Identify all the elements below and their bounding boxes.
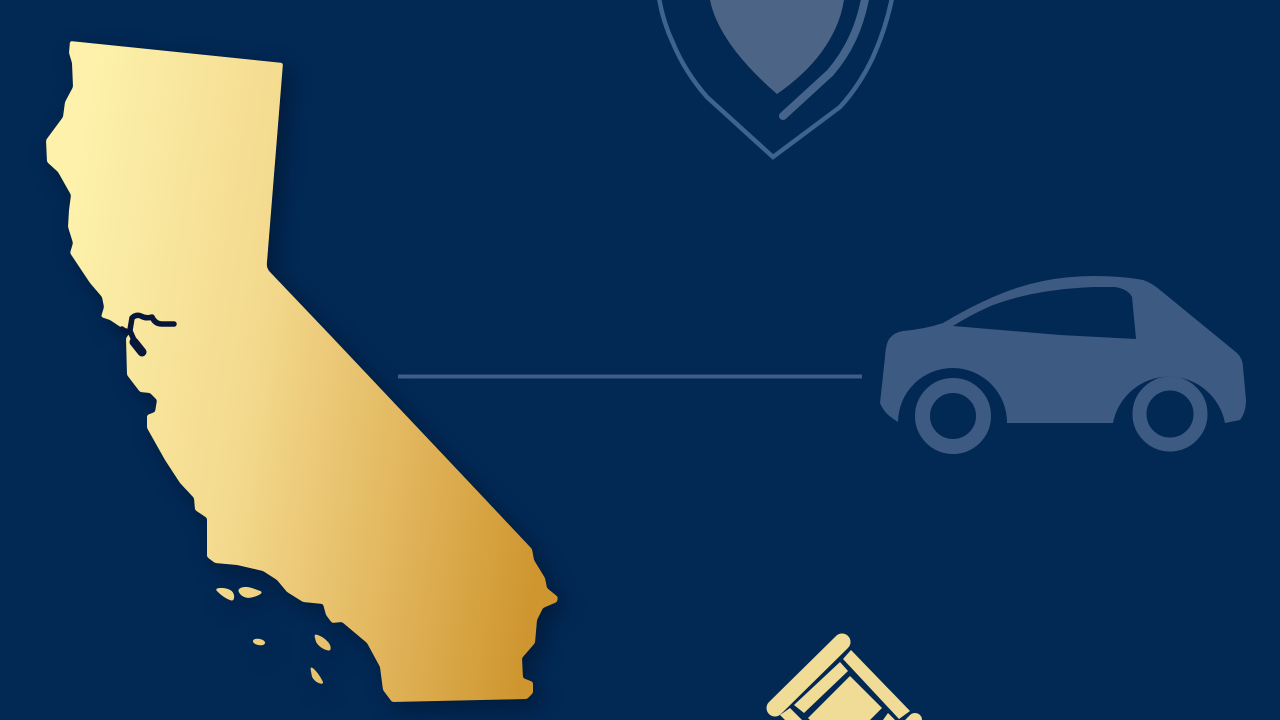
gavel lower right bar	[883, 713, 897, 720]
gavel side bar	[843, 650, 910, 719]
rear wheel	[1140, 384, 1200, 444]
icon: gavel	[775, 642, 915, 720]
gavel lower left bar	[780, 708, 815, 720]
island: west 1	[215, 588, 234, 601]
gavel main block	[808, 676, 882, 720]
gavel thin band	[794, 662, 848, 713]
island: south 1	[314, 634, 331, 651]
icon: shield	[659, 0, 892, 157]
shield inner stripe	[783, 0, 866, 116]
car body	[880, 276, 1246, 423]
connector line	[398, 374, 862, 378]
island: small	[252, 638, 266, 646]
San Francisco Bay	[122, 315, 174, 352]
map: California	[46, 41, 558, 702]
shield solid centre	[710, 0, 844, 94]
icon: car	[880, 276, 1246, 446]
island: south 2	[310, 666, 324, 684]
state outline	[46, 41, 558, 702]
island: west 2	[238, 587, 263, 598]
shield outer outline	[659, 0, 892, 157]
front wheel	[922, 386, 984, 446]
gavel top cap	[775, 642, 842, 708]
